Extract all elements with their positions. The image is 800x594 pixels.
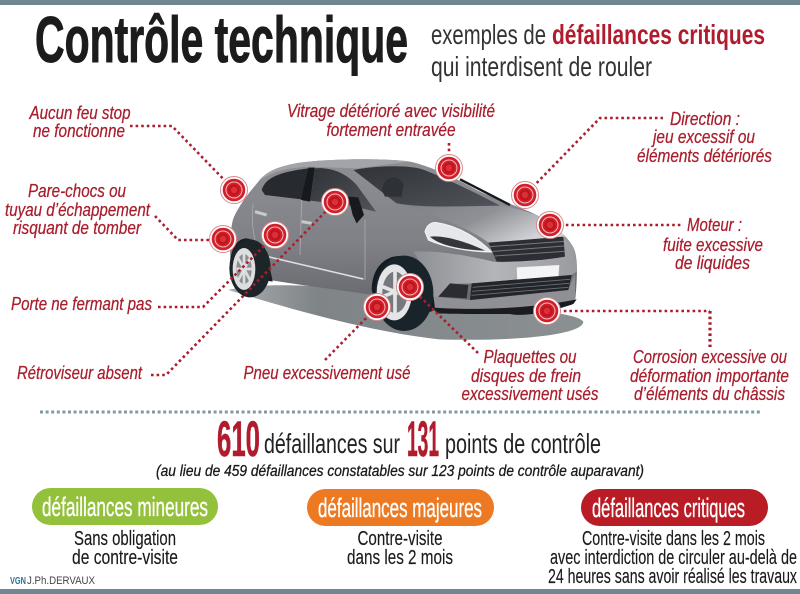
headline stat: points de contrôle xyxy=(445,428,601,459)
rear wheel xyxy=(229,239,271,297)
panel: mineures: défaillances mineures xyxy=(42,492,208,522)
label: pare-chocs xyxy=(5,181,151,238)
license plate xyxy=(517,265,559,281)
car shadow xyxy=(228,285,583,340)
front wheel xyxy=(372,256,435,331)
fog lamp xyxy=(438,283,468,298)
label: direction: éléments détériorés xyxy=(637,146,772,166)
label: moteur: Moteur : xyxy=(687,215,742,235)
subtitle: qui interdisent de rouler xyxy=(431,51,652,82)
separator dots xyxy=(40,410,762,414)
lower grille xyxy=(470,275,572,300)
label: pare-chocs: risquant de tomber xyxy=(13,218,142,238)
label: pare-chocs: Pare-chocs ou xyxy=(28,181,126,201)
windscreen xyxy=(353,166,500,206)
headline stat: 131 xyxy=(407,411,439,467)
label: direction xyxy=(637,109,772,166)
panel: majeures xyxy=(307,489,494,569)
label: moteur: de liquides xyxy=(675,253,750,273)
target markers xyxy=(210,154,564,324)
panel: majeures: Contre-visite xyxy=(358,528,442,550)
rear arch xyxy=(230,238,273,282)
label: vitrage: Vitrage détérioré avec visibilité xyxy=(287,101,495,121)
headline stat: défaillances sur xyxy=(264,428,400,459)
comparison note: (au lieu de 459 défaillances constatables sur 123 points de contrôle auparavant) xyxy=(156,463,644,480)
label: direction: Direction : xyxy=(670,109,740,129)
label: rétroviseur: Rétroviseur absent xyxy=(17,363,143,383)
label: vitrage xyxy=(287,101,495,140)
label: corrosion xyxy=(630,347,789,404)
label: plaquettes: Plaquettes ou xyxy=(484,347,576,367)
label: pneu: Pneu excessivement usé xyxy=(244,363,410,383)
front side window xyxy=(310,168,376,212)
car body xyxy=(230,159,577,310)
label: plaquettes: disques de frein xyxy=(471,366,581,386)
car illustration xyxy=(228,159,583,340)
label: feu stop: ne fonctionne xyxy=(33,121,125,141)
label: moteur xyxy=(663,215,763,273)
panel: majeures: défaillances majeures xyxy=(318,493,482,523)
panel: majeures: dans les 2 mois xyxy=(347,547,453,569)
dotted leader lines xyxy=(130,118,710,375)
label: direction: jeu excessif ou xyxy=(650,127,755,147)
panel: critiques xyxy=(548,489,797,588)
front fender and bumper xyxy=(413,237,577,308)
hood xyxy=(397,202,565,243)
upper grille xyxy=(488,237,565,262)
roof highlight xyxy=(258,159,410,182)
bottom band xyxy=(0,589,800,594)
door lines and handles xyxy=(252,200,365,280)
panel: mineures: Sans obligation xyxy=(74,528,176,550)
rear window xyxy=(262,168,308,199)
label: pare-chocs: tuyau d’échappement xyxy=(5,200,151,220)
label: vitrage: fortement entravée xyxy=(326,120,456,140)
seat silhouettes xyxy=(382,177,403,197)
subtitle xyxy=(431,19,765,82)
label: moteur: fuite excessive xyxy=(663,235,763,255)
label: porte: Porte ne fermant pas xyxy=(11,294,152,314)
front splitter xyxy=(433,299,577,315)
label: feu stop xyxy=(29,103,131,141)
panel: mineures: de contre-visite xyxy=(72,547,178,569)
lower bumper xyxy=(433,273,575,309)
label: feu stop: Aucun feu stop xyxy=(29,103,131,123)
wiper xyxy=(460,179,510,205)
mirror xyxy=(348,197,364,223)
subtitle: exemples de xyxy=(431,19,546,50)
headline stat xyxy=(217,411,601,467)
panel: mineures xyxy=(32,488,218,569)
title: Contrôle technique xyxy=(35,3,408,76)
headline stat: 610 xyxy=(217,411,260,467)
headlight xyxy=(425,222,492,252)
label: plaquettes: excessivement usés xyxy=(462,384,598,404)
top band xyxy=(0,0,800,5)
credit: J.Ph.DERVAUX xyxy=(27,575,96,587)
label: plaquettes xyxy=(462,347,598,404)
door pillar xyxy=(301,168,315,202)
credit: VGN xyxy=(10,575,26,587)
